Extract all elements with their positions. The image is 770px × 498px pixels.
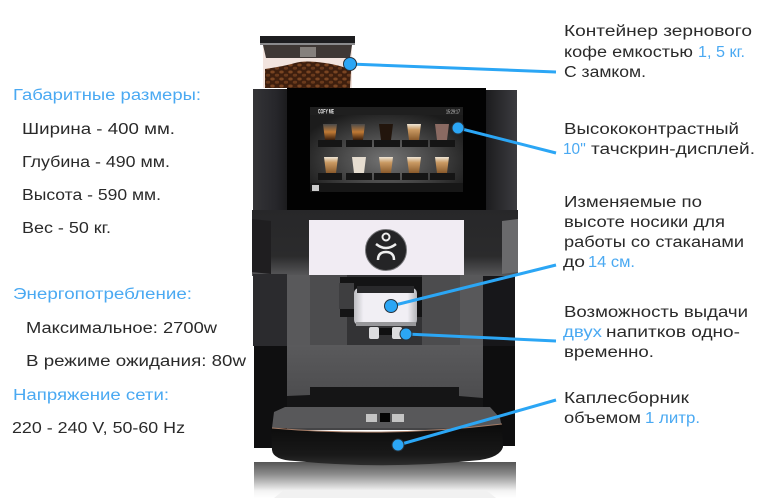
heading: power: Энергопотребление: (13, 286, 192, 303)
callout: adjustable spouts: работы со стаканами (564, 234, 744, 251)
drink cups (323, 124, 449, 173)
callout: two drinks: напитков одно- (606, 324, 740, 341)
floor reflection (254, 462, 516, 498)
machine body lower (254, 345, 515, 448)
callout: adjustable spouts: Изменяемые по (564, 194, 702, 211)
callout lines (350, 64, 556, 445)
panel: coffee machine (252, 36, 518, 498)
callout: two drinks: двух (563, 324, 602, 341)
callout: drip tray (564, 390, 700, 427)
width: Ширина - 400 мм. (22, 121, 175, 138)
callout: touch display (563, 121, 755, 158)
callout: two drinks: Возможность выдачи (564, 304, 748, 321)
callout: adjustable spouts: высоте носики для (564, 214, 725, 231)
callout: bean container: С замком. (564, 64, 646, 81)
standby power: В режиме ожидания: 80w (26, 353, 247, 370)
voltage value: 220 - 240 V, 50-60 Hz (12, 420, 185, 437)
screen bezel (287, 88, 486, 210)
callout: bean container: Контейнер зернового (564, 23, 752, 40)
weight: Вес - 50 кг. (22, 220, 111, 237)
depth: Глубина - 490 мм. (22, 154, 170, 171)
callout: drip tray: объемом (564, 410, 641, 427)
touch screen (310, 107, 463, 192)
panel: dimensions (13, 87, 201, 237)
callout: touch display: тачскрин-дисплей. (591, 141, 755, 158)
height: Высота - 590 мм. (22, 187, 161, 204)
heading: dimensions: Габаритные размеры: (13, 87, 201, 104)
machine body middle (253, 274, 515, 346)
callout: bean container: кофе емкостью (564, 44, 693, 61)
screen clock: 15:29:17 (446, 110, 460, 116)
callout: drip tray: Каплесборник (564, 390, 689, 407)
panel: power (12, 286, 247, 437)
callout: bean container: 1, 5 кг. (698, 44, 745, 61)
screen logo: COFY ME (318, 110, 334, 116)
callout: drip tray: 1 литр. (645, 410, 700, 427)
callout: touch display: Высококонтрастный (564, 121, 739, 138)
heading: voltage: Напряжение сети: (13, 387, 169, 404)
maximum power: Максимальное: 2700w (26, 320, 218, 337)
callout: two drinks: временно. (564, 344, 654, 361)
spouts (369, 327, 402, 339)
callout: bean container (564, 23, 752, 81)
machine body upper (252, 89, 518, 276)
callout: touch display: 10'' (563, 141, 586, 158)
coffee dispenser (339, 277, 422, 339)
white logo panel (309, 220, 464, 275)
callout: two drinks (563, 304, 748, 361)
callout: adjustable spouts (563, 194, 744, 271)
callout: adjustable spouts: 14 см. (588, 254, 635, 271)
drip tray (271, 387, 503, 465)
callout dots (344, 58, 464, 451)
callout: adjustable spouts: до (563, 254, 585, 271)
tray grille (366, 413, 404, 422)
drink name bars (318, 140, 455, 180)
round logo (366, 230, 406, 270)
bean hopper (260, 36, 355, 88)
